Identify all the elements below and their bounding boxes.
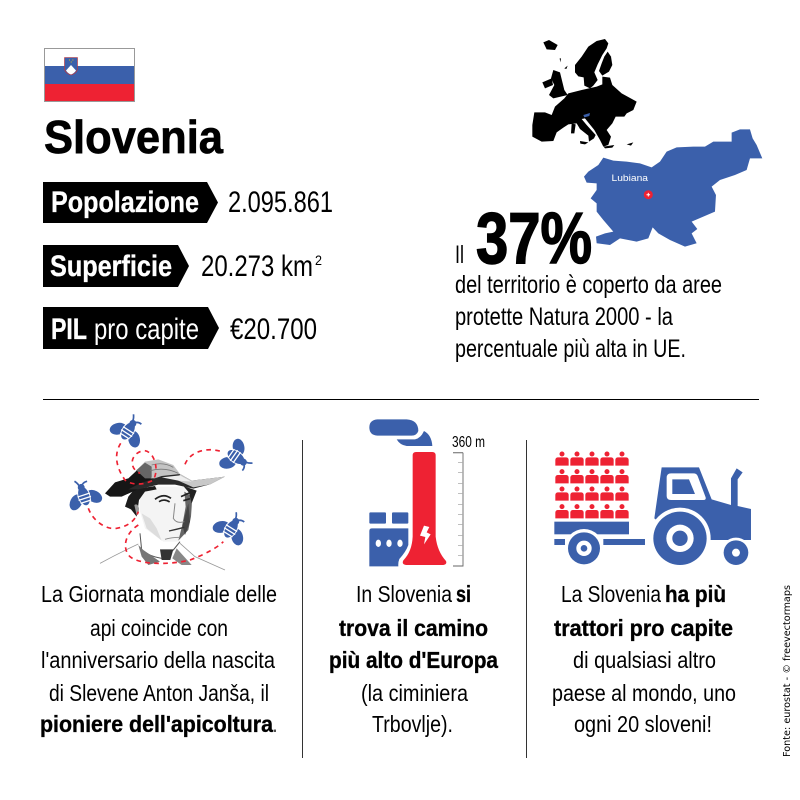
stat: population: Popolazione xyxy=(51,186,199,219)
text: 37 percent xyxy=(455,199,722,363)
icon: tractor and trailer xyxy=(554,467,751,569)
icon: bee top xyxy=(104,406,154,453)
text: bee day: pioniere dell'apicoltura xyxy=(40,711,273,737)
stat: GDP per capita: pro capite xyxy=(94,313,199,346)
text: tractors: trattori pro capite xyxy=(554,615,733,641)
text: bee day: di Slevene Anton Janša, il xyxy=(49,680,269,706)
capital marker xyxy=(644,190,653,199)
text: chimney: trova il camino xyxy=(339,615,488,641)
text: bee day: api coincide con xyxy=(90,615,228,641)
text: chimney: Trbovlje). xyxy=(372,711,453,737)
icon: bee right xyxy=(214,433,261,483)
text: chimney: (la ciminiera xyxy=(361,680,468,706)
map: Slovenia xyxy=(584,129,762,247)
text: 37 percent: del territorio è coperto da aree xyxy=(455,271,722,299)
stat: area: 2 xyxy=(315,252,322,268)
icon: people on trailer xyxy=(555,451,629,518)
stat: GDP per capita xyxy=(43,307,317,349)
scale: 360 m: 360 m xyxy=(452,434,485,451)
panel: chimney xyxy=(329,419,498,737)
text: 37 percent: protette Natura 2000 - la xyxy=(455,303,673,331)
panel: bees xyxy=(40,406,277,737)
panel: tractors xyxy=(552,451,751,737)
stat: area: 20.273 km xyxy=(201,250,313,283)
text: bee day: l'anniversario della nascita xyxy=(41,647,275,673)
text: bee day: La Giornata mondiale delle xyxy=(41,581,277,607)
stat: population xyxy=(43,182,333,223)
text: tractors: La Slovenia xyxy=(561,581,661,607)
text: 37 percent: percentuale più alta in UE. xyxy=(455,335,686,363)
stat: GDP per capita: €20.700 xyxy=(230,313,317,346)
text: tractors: di qualsiasi altro xyxy=(573,647,716,673)
flag of Slovenia xyxy=(44,48,135,102)
scale: 360 m xyxy=(452,434,485,566)
map: Europe xyxy=(532,39,637,148)
text: 37 percent: 37% xyxy=(476,199,592,279)
panel: country facts xyxy=(43,48,333,349)
icon: chimney and factory xyxy=(369,419,446,566)
text: tractors: ha più xyxy=(665,581,726,607)
stat: area xyxy=(43,245,322,287)
text: chimney xyxy=(329,581,498,737)
stat: population: 2.095.861 xyxy=(228,186,333,219)
icon: bee lower right xyxy=(207,504,257,551)
illustration: Anton Janša portrait xyxy=(100,459,225,572)
text: chimney: si xyxy=(456,581,471,607)
icon: bee left xyxy=(60,474,107,515)
title: Slovenia xyxy=(44,111,223,163)
text: chimney: In Slovenia xyxy=(356,581,452,607)
source credit: Fonte: eurostat - © freevectormaps xyxy=(782,585,793,757)
stat: GDP per capita: PIL xyxy=(51,313,87,346)
text: tractors xyxy=(552,581,736,737)
text: tractors: paese al mondo, uno xyxy=(552,680,736,706)
panel: protected areas xyxy=(455,39,762,363)
text: tractors: ogni 20 sloveni! xyxy=(574,711,712,737)
label: Lubiana: Lubiana xyxy=(612,173,648,183)
stat: area: Superficie xyxy=(50,250,172,283)
flight paths xyxy=(88,443,223,563)
text: 37 percent: Il xyxy=(455,241,464,269)
text: bee day: . xyxy=(273,711,277,737)
text: chimney: più alto d'Europa xyxy=(329,647,498,673)
text: bee day xyxy=(40,581,277,737)
